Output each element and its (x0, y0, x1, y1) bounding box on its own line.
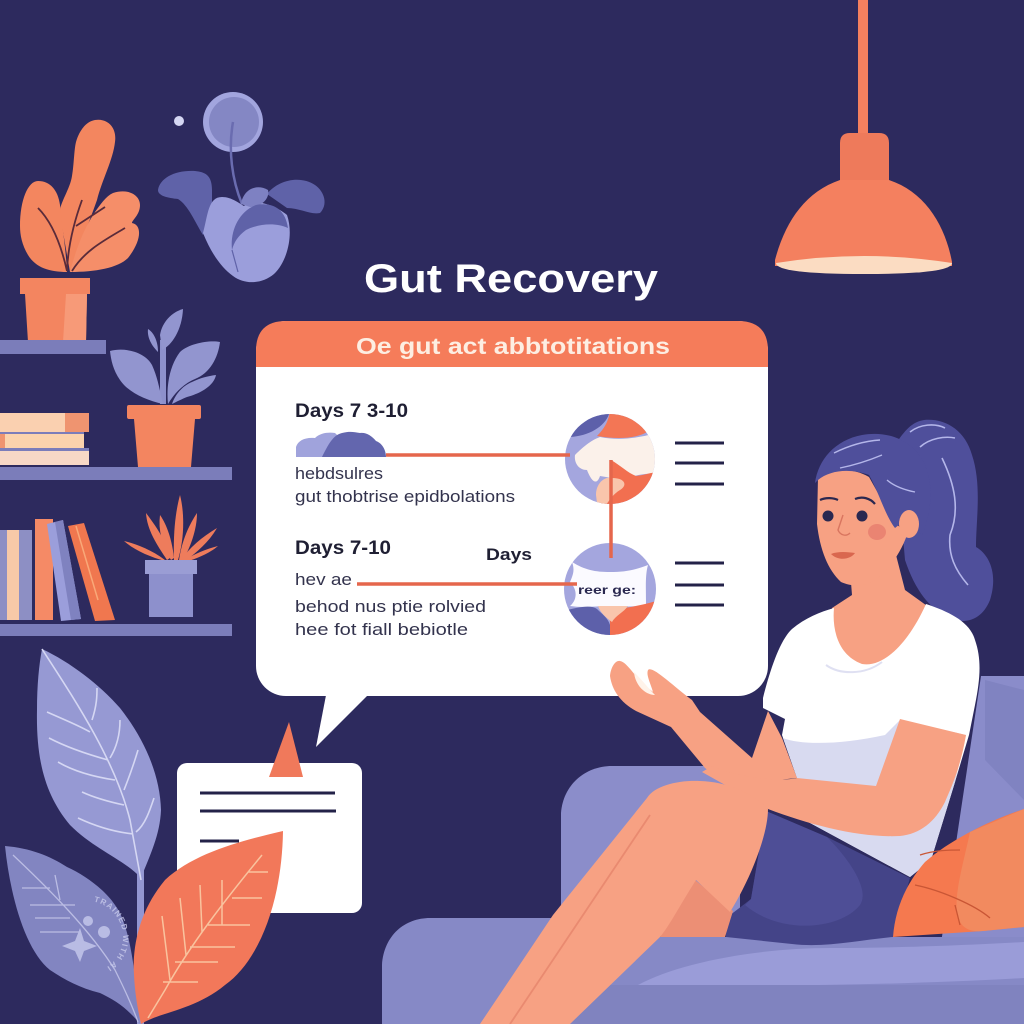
illustration: sofa (382, 676, 1024, 1024)
icon: spiky potted plant (124, 495, 218, 617)
lower leg behind (660, 880, 733, 937)
collar fold (826, 662, 882, 672)
cheek (868, 524, 886, 540)
title: Gut Recovery (364, 257, 659, 301)
shelf: bottom (0, 624, 232, 636)
section: first stage text: hebdsulres (295, 464, 383, 483)
section: first stage text: Days 7 3-10 (295, 401, 408, 422)
left arm and hand (610, 661, 797, 785)
card header band (256, 321, 768, 367)
section: second stage text (295, 538, 532, 639)
panel: small note card (177, 763, 362, 913)
section: second stage text: hee fot fiall bebiotle (295, 620, 468, 639)
section: first stage text: gut thobtrise epidbolations (295, 487, 515, 506)
books: horizontal stack (0, 413, 89, 465)
icon: gut globe, top (565, 414, 655, 504)
face (817, 470, 907, 585)
books: upright row (0, 519, 115, 621)
shirt shadow (783, 720, 966, 877)
hair streaks (910, 425, 968, 585)
section: second stage text: hev ae (295, 570, 352, 589)
icon: large lavender leaf (37, 649, 161, 1024)
hair top (815, 434, 931, 535)
connector lines (357, 455, 611, 584)
icon: cloud (296, 432, 386, 457)
icon: orange triangle marker (269, 722, 303, 777)
legend lines, top (675, 443, 724, 484)
section: second stage text: Days (486, 545, 532, 564)
icon: gut globe, bottom (564, 543, 656, 635)
shelf: middle (0, 467, 232, 480)
leg crease (510, 815, 650, 1024)
icon: orange leaf (134, 831, 283, 1024)
hair highlights (834, 440, 915, 492)
section: second stage text: Days 7-10 (295, 538, 391, 559)
illustration: orange cushion (893, 809, 1024, 937)
illustration: seated woman (480, 420, 993, 1024)
icon: lavender potted plant (110, 309, 220, 467)
shorts highlight (745, 811, 863, 926)
section: first stage text (295, 401, 515, 506)
icon: gut globe, bottom: reer ge: (578, 585, 636, 597)
crossed leg (480, 781, 768, 1024)
right forearm (702, 719, 966, 836)
panel: speech bubble card (256, 321, 768, 747)
ear (899, 510, 919, 538)
icon: small dot (174, 116, 184, 126)
shelf: top (0, 340, 106, 354)
section: second stage text: behod nus ptie rolvied (295, 597, 486, 616)
neck (830, 555, 930, 672)
icon: lower left leaf with faint stamp (5, 846, 140, 1024)
eyes and brows (820, 498, 875, 522)
mouth (831, 552, 855, 559)
shorts (725, 811, 910, 945)
legend lines, bottom (675, 563, 724, 605)
palm highlight (634, 672, 655, 695)
card header band: Oe gut act abbtotitations (356, 333, 670, 359)
icon: hanging lamp (775, 0, 952, 274)
icon: lavender flower (158, 92, 325, 282)
hair ponytail (895, 420, 993, 621)
icon: orange potted plant (20, 120, 140, 342)
shirt (763, 604, 980, 877)
nose (838, 515, 850, 535)
icon: lower left leaf with faint stamp: TRAINED WITH AI (95, 896, 129, 972)
